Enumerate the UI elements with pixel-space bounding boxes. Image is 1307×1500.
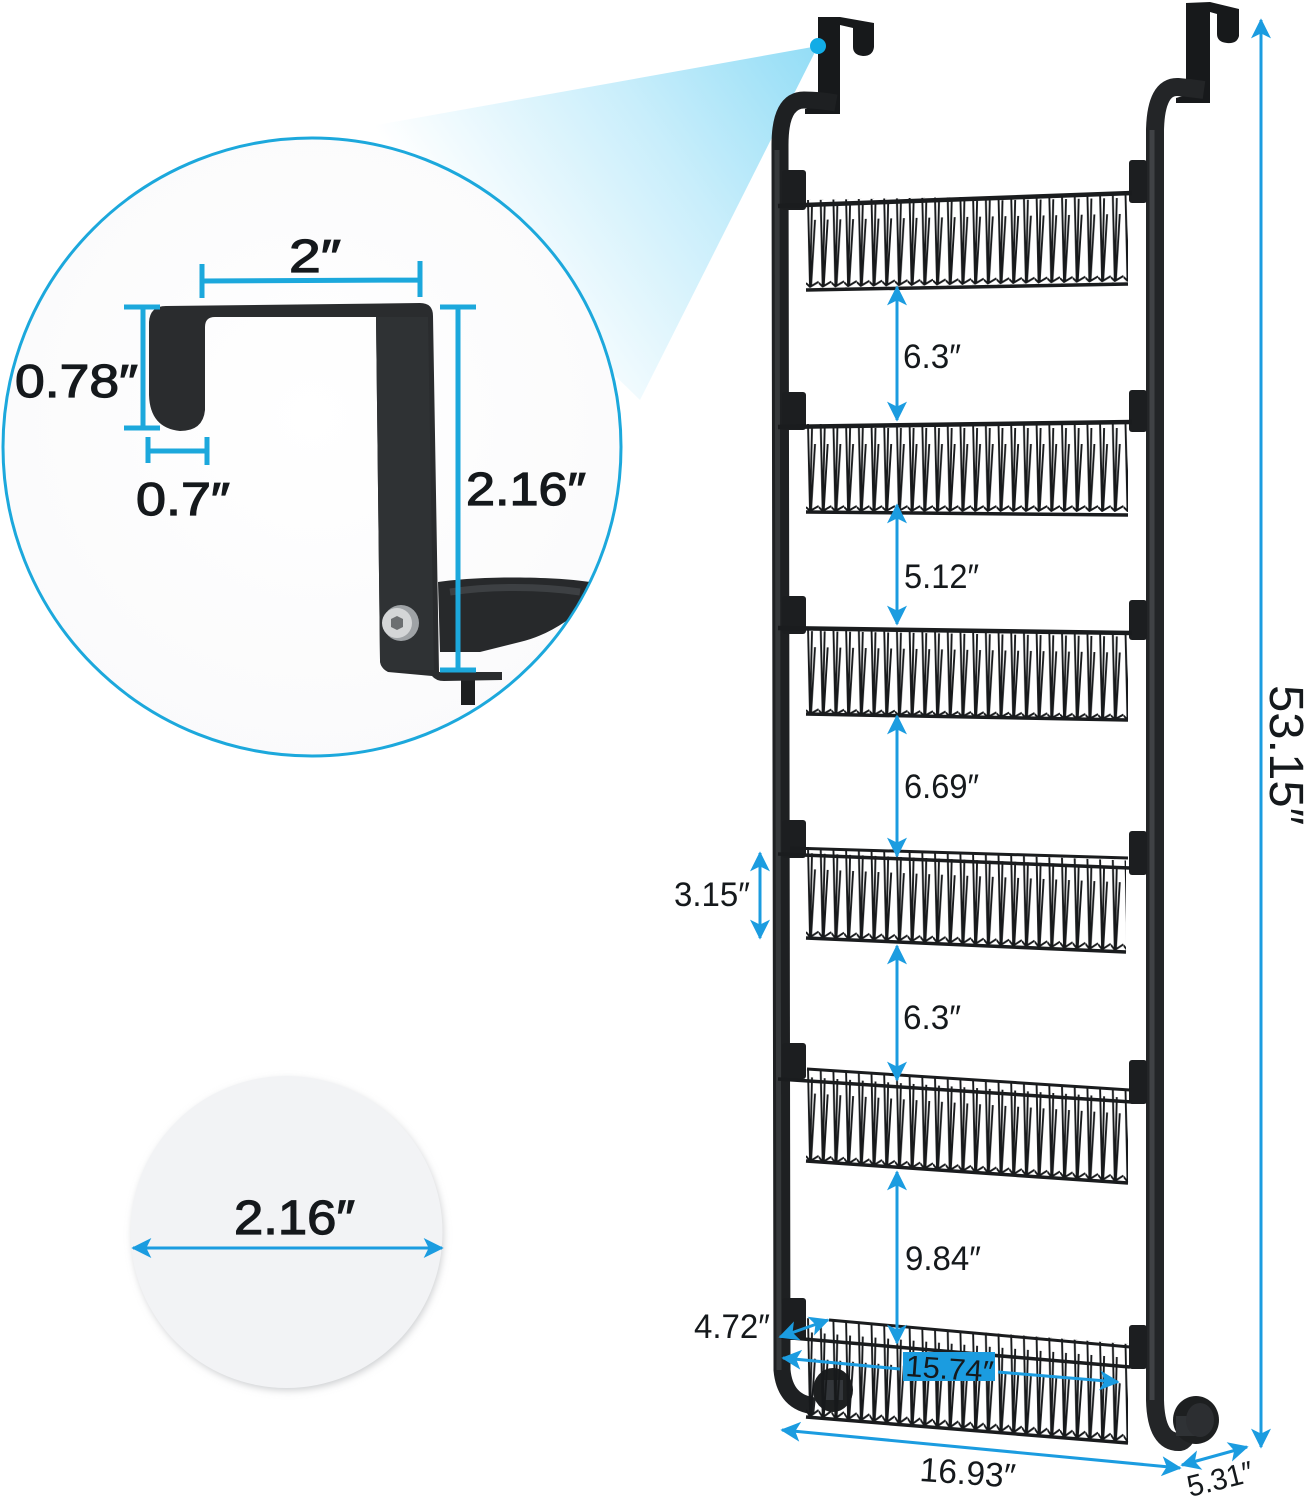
dimension: overall width 16.93: 16.93″ (918, 1451, 1017, 1496)
dimension: gap 6.3 lower (897, 946, 961, 1080)
label: disc diameter: 2.16″ (234, 1192, 355, 1245)
dimension: gap 6.3 top (897, 287, 961, 420)
dimension: gap 6.69 (897, 716, 979, 856)
left door hook (805, 17, 874, 114)
dimension: overall width 16.93 (782, 1430, 1180, 1496)
dimension: gap 5.12: 5.12″ (904, 558, 979, 596)
dimension: 0.78 inch (15, 307, 160, 428)
dimension: basket height 3.15: 3.15″ (674, 876, 750, 914)
large hook photo (149, 303, 590, 705)
dimension: 0.7 inch: 0.7″ (136, 473, 230, 525)
right frame post (1152, 87, 1204, 1442)
right wall bumper (1173, 1396, 1219, 1444)
dimension: basket width 15.74 (783, 1350, 1118, 1389)
basket 4 (778, 820, 1147, 952)
callout dot (810, 38, 826, 54)
dimension: basket depth 4.72: 4.72″ (694, 1308, 770, 1346)
dimension: basket height 3.15 (674, 853, 760, 938)
right door hook (1176, 2, 1239, 103)
dimension: basket width 15.74: 15.74″ (905, 1350, 995, 1389)
basket 3 (778, 596, 1147, 721)
basket 5 (778, 1043, 1147, 1183)
left frame post (777, 100, 836, 1406)
dimension: 0.7 inch (136, 437, 230, 525)
dimension: 2 inch: 2″ (289, 230, 341, 282)
dimension: gap 6.3 top: 6.3″ (903, 338, 961, 376)
dimension: gap 9.84: 9.84″ (905, 1240, 981, 1278)
dimension: basket depth 4.72 (694, 1308, 828, 1346)
dimension: gap 5.12 (897, 505, 979, 624)
dimension: 0.78 inch: 0.78″ (15, 355, 138, 407)
basket 2 (778, 390, 1147, 515)
dimension: 2 inch (202, 230, 420, 298)
left wall bumper (813, 1368, 853, 1412)
dimension: gap 6.3 lower: 6.3″ (903, 999, 961, 1037)
panel: round adhesive disc (130, 1076, 443, 1390)
basket 6 (780, 1298, 1147, 1443)
rack illustration (777, 2, 1239, 1444)
basket 1 (778, 160, 1147, 290)
dimension: gap 6.69: 6.69″ (904, 768, 979, 806)
dimension: 2.16 inch (440, 307, 586, 670)
callout cone: zoom highlight (360, 46, 818, 400)
dimension: 2.16 inch: 2.16″ (466, 463, 586, 515)
arrow: disc diameter (133, 1246, 442, 1250)
panel: hook detail circle (3, 138, 621, 756)
